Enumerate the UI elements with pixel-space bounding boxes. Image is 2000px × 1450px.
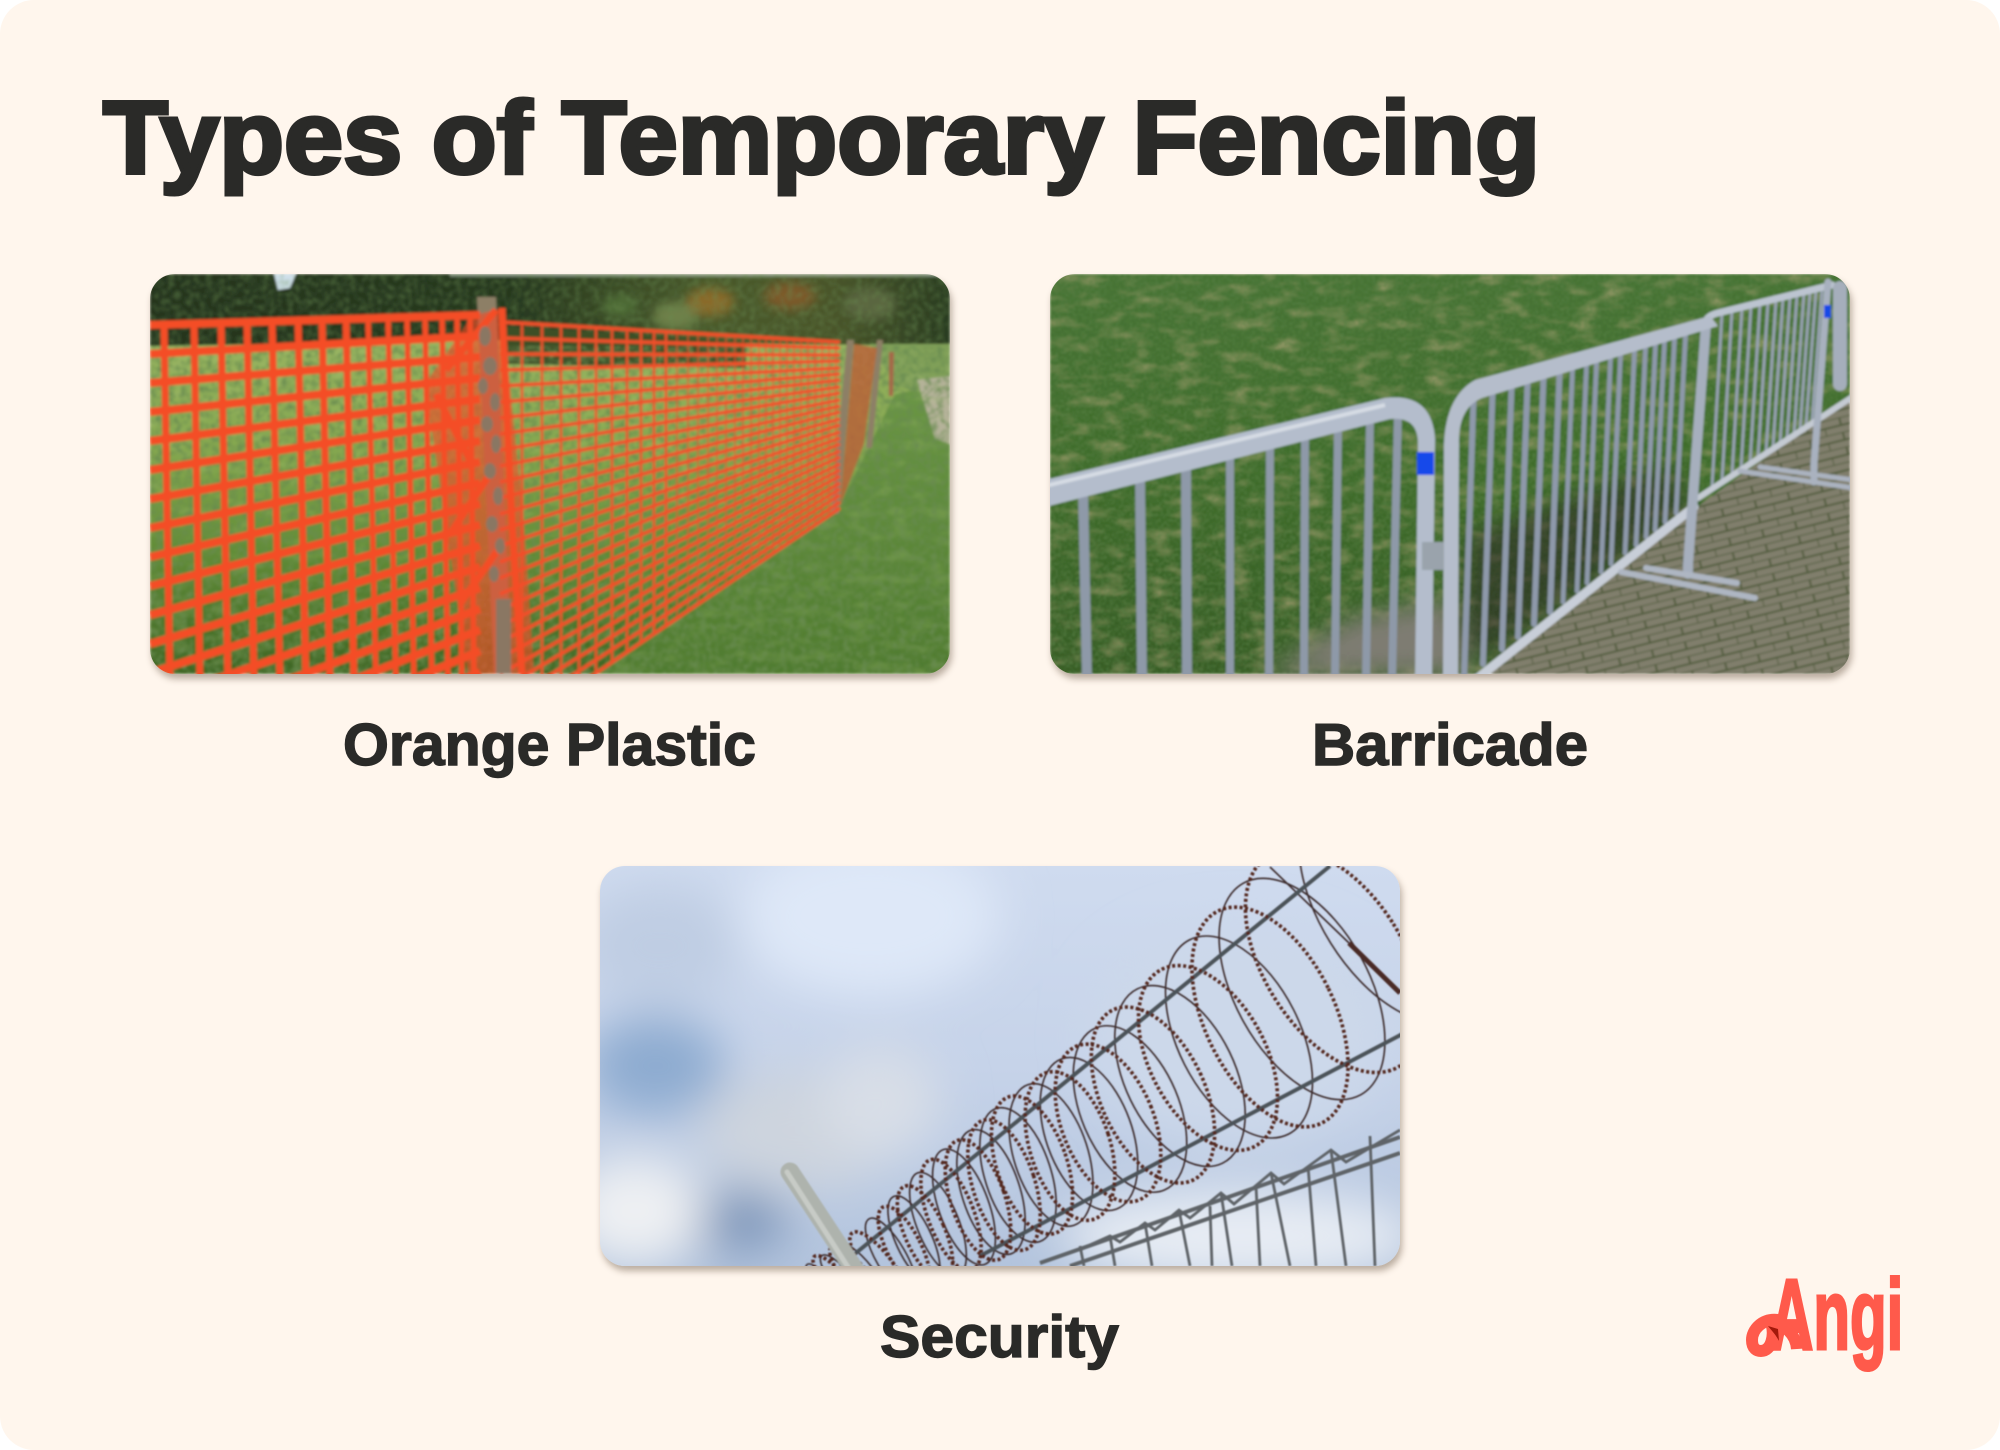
crumpled mesh at post [425, 308, 534, 674]
dense upper right coil edge [1349, 943, 1400, 993]
razor wire barbed coils [807, 819, 1459, 1313]
panel: orange plastic photo [150, 274, 950, 674]
razor wire inner coils [801, 759, 1518, 1313]
clouds [565, 836, 1420, 1281]
lower mesh fence [1040, 1130, 1400, 1266]
small blue tag [1824, 305, 1831, 318]
label: Orange Plastic: Orange Plastic [343, 712, 756, 778]
panel: barricade photo [1050, 274, 1850, 674]
metal pole [787, 1172, 862, 1281]
title: Types of Temporary Fencing [103, 80, 1540, 195]
panel: security photo [600, 866, 1400, 1266]
fence posts [477, 297, 894, 674]
far orange fence section [840, 344, 877, 506]
left mesh panel [150, 315, 480, 818]
second barrier [1464, 324, 1755, 679]
blue tag [1417, 452, 1434, 475]
grass slope [1050, 274, 1850, 674]
trees and grass background [150, 274, 950, 674]
second barrier rail [1443, 316, 1718, 679]
support rails [840, 866, 1410, 1266]
label: Security: Security [880, 1304, 1119, 1370]
shadow and rock under fence [1265, 464, 1690, 674]
label: Barricade: Barricade [1312, 712, 1588, 778]
clamp [1422, 542, 1444, 570]
brick paving [1480, 397, 1850, 674]
right mesh panel [500, 322, 840, 738]
sky [600, 866, 1400, 1266]
front barrier rail [1045, 397, 1435, 679]
third barrier [1698, 282, 1860, 498]
front barrier [1083, 411, 1398, 679]
